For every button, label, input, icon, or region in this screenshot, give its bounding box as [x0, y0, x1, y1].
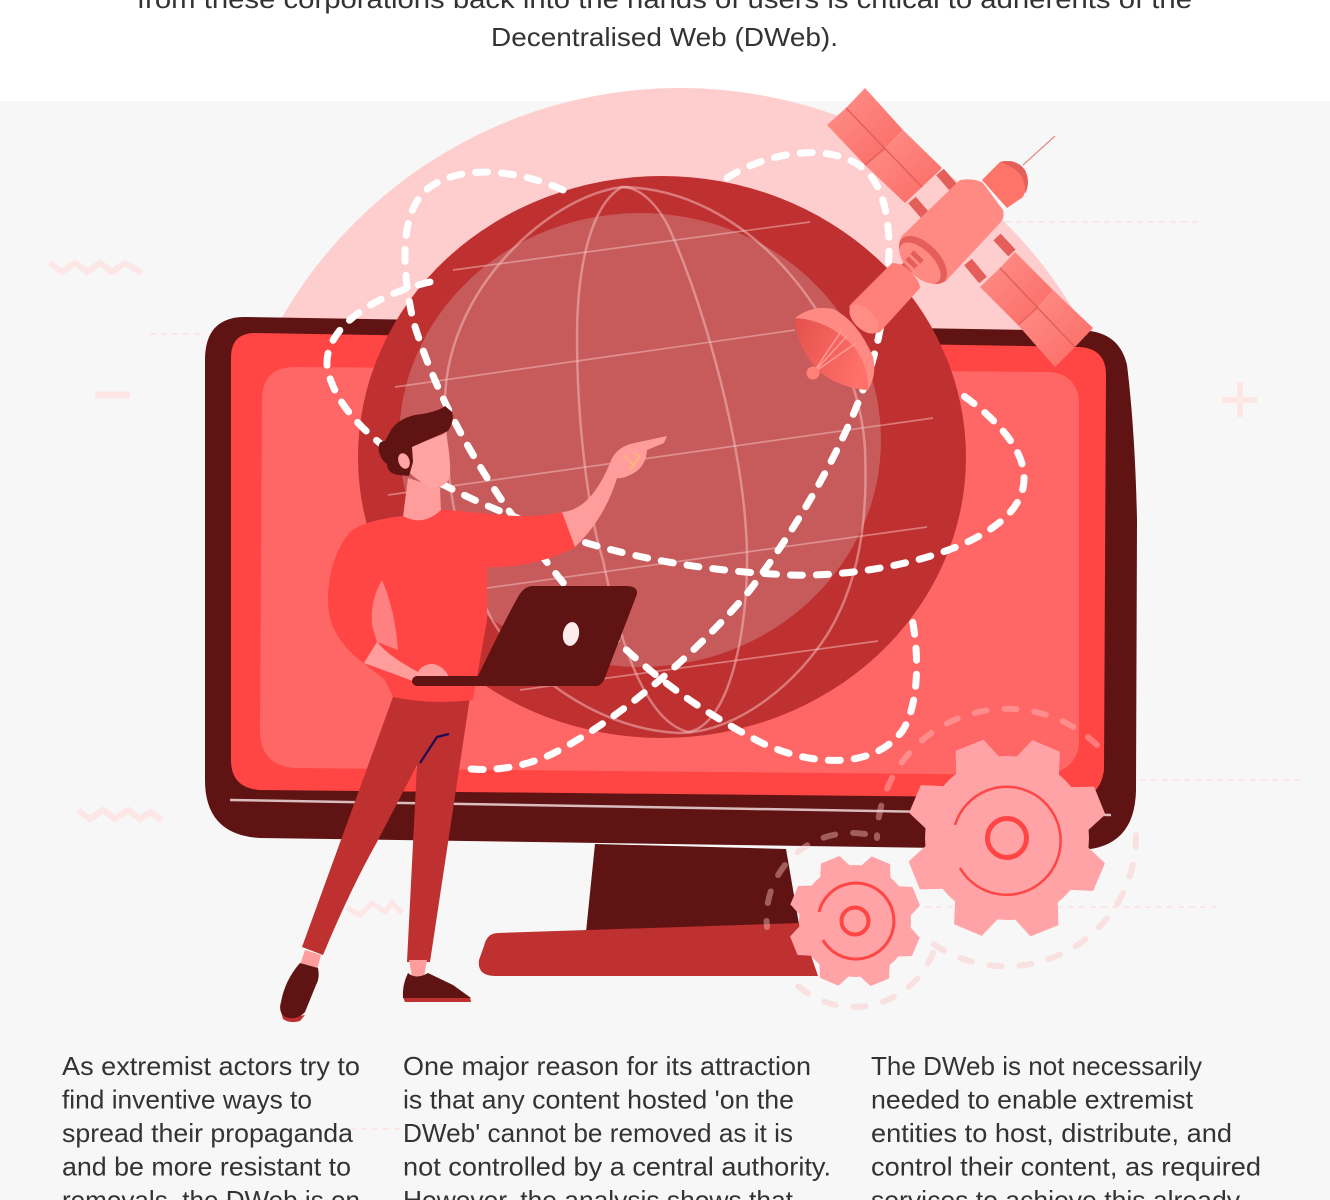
monitor base — [479, 923, 818, 976]
face — [407, 433, 450, 488]
satellite body — [900, 179, 1004, 282]
monitor stand — [586, 844, 800, 932]
small gear — [787, 853, 923, 989]
text column 2: One major reason for its attraction — [403, 1051, 811, 1081]
antenna — [1023, 136, 1055, 165]
satellite dish — [795, 308, 874, 390]
screen inner panel — [260, 367, 1079, 775]
text column 2: not controlled by a central authority. — [403, 1152, 831, 1182]
trouser crease — [420, 734, 449, 763]
globe body — [358, 176, 966, 738]
ear — [396, 452, 412, 470]
text column 3: control their content, as required — [871, 1152, 1261, 1182]
text column 2: DWeb' cannot be removed as it is — [403, 1118, 793, 1148]
dish feed — [813, 330, 856, 373]
hair — [379, 406, 453, 476]
satellite — [795, 88, 1093, 390]
text column 1 — [62, 1051, 360, 1200]
intro text: Decentralised Web (DWeb). — [491, 22, 838, 52]
solar panel arm bars — [912, 172, 1012, 280]
palm mark — [624, 453, 640, 470]
solar panel seams — [846, 108, 1075, 347]
pink backdrop circle — [282, 88, 1073, 330]
intro text — [137, 0, 1192, 52]
satellite body end — [890, 227, 956, 293]
solar panels — [827, 88, 1093, 367]
gap between arm and torso — [372, 580, 398, 650]
text column 1: spread their propaganda — [62, 1118, 354, 1148]
person — [280, 406, 667, 1022]
shirt — [328, 510, 576, 702]
ankles — [300, 950, 427, 977]
left shoe — [280, 963, 319, 1022]
dashed orbits — [327, 153, 1024, 769]
dish rim — [795, 308, 874, 390]
text column 3 — [871, 1051, 1261, 1200]
large gear — [905, 736, 1109, 940]
monitor highlight — [230, 800, 1111, 815]
monitor — [205, 317, 1137, 976]
lower arm and hand — [364, 642, 450, 681]
text column 3: needed to enable extremist — [871, 1084, 1194, 1114]
right shoe — [403, 973, 471, 1002]
text column 1: find inventive ways to — [62, 1084, 312, 1114]
neck — [403, 478, 441, 521]
monitor screen — [231, 333, 1106, 798]
top cap — [982, 161, 1027, 208]
laptop — [412, 586, 637, 686]
text column 3: The DWeb is not necessarily — [871, 1051, 1202, 1081]
text column 2: is that any content hosted 'on the — [403, 1084, 794, 1114]
text column 1: As extremist actors try to — [62, 1051, 360, 1081]
text column 2 — [403, 1051, 831, 1200]
globe — [358, 176, 966, 738]
trousers — [302, 697, 470, 962]
globe grid lines — [388, 187, 933, 733]
background decorations — [50, 222, 1300, 1129]
laptop lid — [478, 586, 637, 686]
dashed gear circles — [767, 709, 1136, 1007]
text column 1: and be more resistant to — [62, 1152, 351, 1182]
satellite tube — [849, 263, 920, 333]
laptop base — [412, 676, 602, 686]
globe highlight — [399, 213, 881, 667]
monitor frame — [205, 317, 1137, 850]
laptop logo — [561, 621, 581, 647]
text column 3: entities to host, distribute, and — [871, 1118, 1232, 1148]
raised arm and hand — [562, 436, 667, 547]
